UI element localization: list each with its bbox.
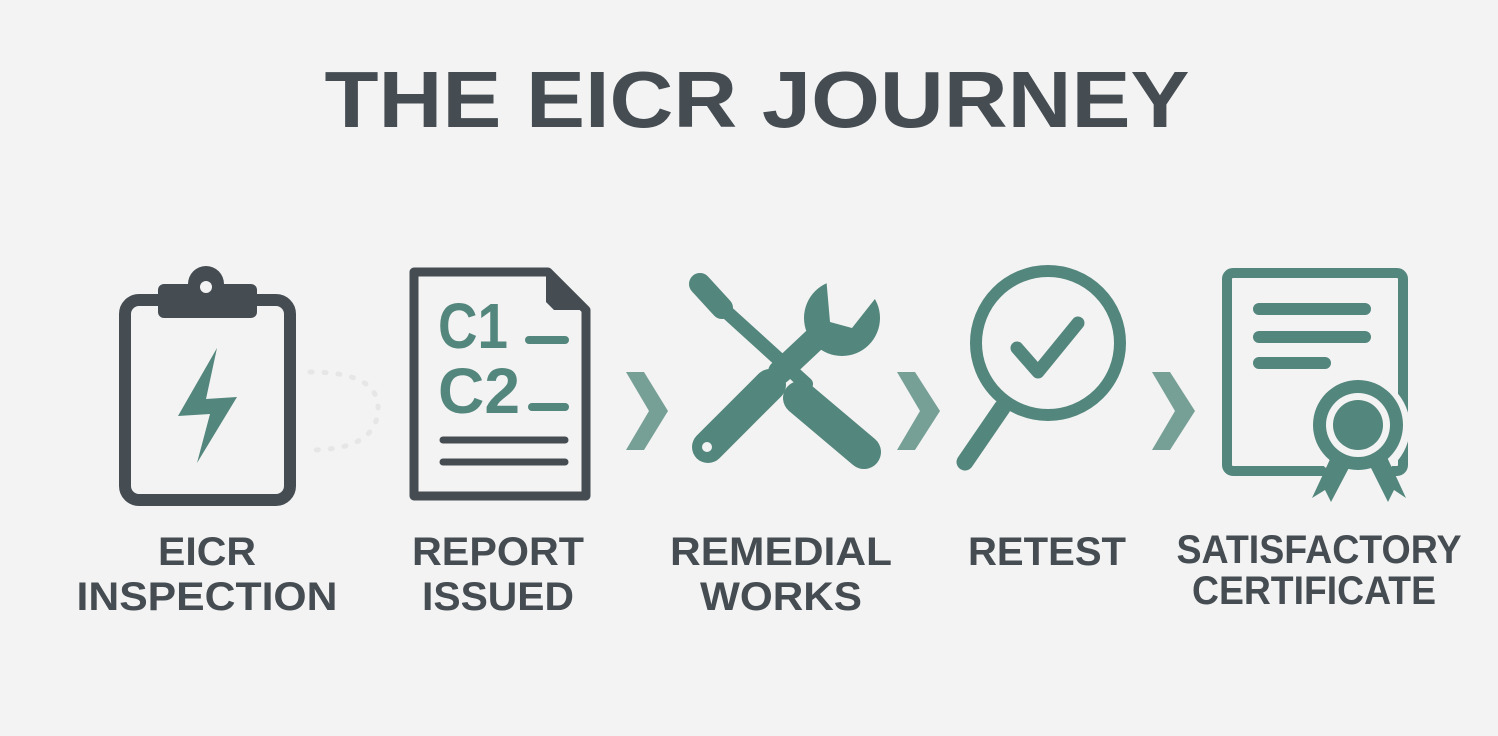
icon: report document: C2 — [438, 355, 520, 427]
label: EICR inspection: INSPECTION — [76, 575, 338, 619]
icon: report document: C1 — [438, 290, 508, 362]
label: EICR inspection: EICR — [158, 530, 256, 574]
arrow: chevron 2 — [897, 372, 940, 450]
arrow: chevron 3 — [1152, 372, 1195, 450]
label: satisfactory certificate: CERTIFICATE — [1192, 569, 1436, 613]
label: report issued — [412, 530, 584, 619]
label: retest: RETEST — [968, 530, 1126, 574]
icon: magnifier with check — [965, 271, 1120, 462]
icon: screwdriver and wrench — [698, 262, 884, 452]
title: THE EICR JOURNEY — [324, 55, 1190, 144]
icon: clipboard with lightning — [125, 266, 290, 500]
label: report issued: REPORT — [412, 530, 584, 574]
label: EICR inspection — [76, 530, 338, 619]
label: remedial works: REMEDIAL — [670, 530, 892, 574]
label: report issued: ISSUED — [422, 575, 574, 619]
icon: report document — [414, 268, 590, 496]
icon: certificate with badge — [1227, 273, 1410, 502]
label: satisfactory certificate — [1176, 528, 1462, 613]
label: remedial works — [670, 530, 892, 619]
arrow: faint dotted connector — [310, 372, 378, 450]
label: remedial works: WORKS — [700, 575, 862, 619]
arrow: chevron 1 — [626, 372, 668, 450]
label: satisfactory certificate: SATISFACTORY — [1176, 528, 1462, 572]
